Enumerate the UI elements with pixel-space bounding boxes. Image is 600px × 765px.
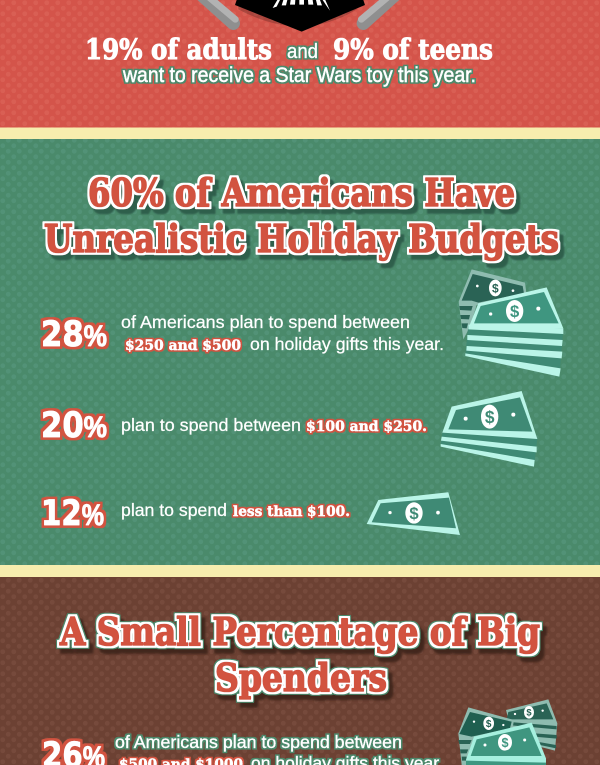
text: 12% description [121,500,350,520]
text: 28% description [121,312,444,354]
text: 26% description: of Americans plan to spend between [115,732,402,752]
text: 28% description: $250 and $500 [125,338,241,354]
heading: A Small Percentage of Big Spenders [59,609,540,700]
panel: red toy section [0,0,600,128]
text: want to receive a Star Wars toy this year: want to receive a Star Wars toy this year. [122,64,476,87]
icon: single bill [367,492,460,535]
icon: two stacks of cash [459,269,563,377]
icon: three stacks of cash: $ [486,719,492,730]
icon: Darth Vader helmet with lightsabers [200,0,397,32]
divider: cream band lower [0,565,600,577]
icon: stack of cash: $ [485,407,495,427]
text: 12% description: plan to spend [121,500,227,520]
panel: unrealistic budgets [0,139,600,565]
text: 26% description [115,732,443,765]
icon: single bill: $ [409,504,419,523]
text: 19% of adults: 19% of adults [85,33,272,66]
text: 12% description: less than $100. [233,504,350,520]
heading: 60% of Americans Have Unrealistic Holiday Budgets: 60% of Americans Have [88,170,515,215]
text: 20% description: $100 and $250. [306,419,427,435]
icon: three stacks of cash: $ [526,708,532,718]
panel: big spenders [0,577,600,765]
text: 20% description [121,415,427,435]
icon: stack of cash [441,391,537,467]
icon: two stacks of cash: $ [510,302,520,321]
text: 9% of teens: 9% of teens [333,33,493,66]
heading: A Small Percentage of Big Spenders: Spenders [215,655,387,700]
heading: 60% of Americans Have Unrealistic Holiday Budgets [44,170,559,261]
icon: three stacks of cash [458,699,557,765]
text: 28% description: of Americans plan to spend between [121,312,410,332]
text: 20% description: plan to spend between [121,415,301,435]
stat: 28%: 28% [41,315,107,355]
divider: cream band [0,128,600,139]
icon: three stacks of cash: $ [501,736,509,750]
text: and: and [287,41,318,63]
stat: 12%: 12% [41,494,104,534]
text: 28% description: on holiday gifts this year. [250,334,444,354]
stat: 20%: 20% [41,406,107,446]
icon: two stacks of cash: $ [492,281,499,295]
